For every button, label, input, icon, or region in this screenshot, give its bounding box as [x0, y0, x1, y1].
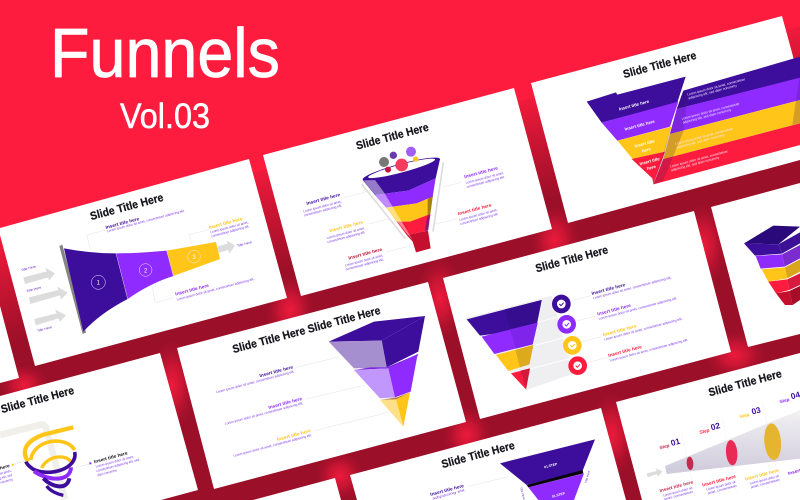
left labels: here — [641, 146, 652, 153]
band descriptions: Lorem ipsum dolor sit amet, consectetuer — [670, 149, 729, 169]
connector lines — [344, 182, 462, 252]
callout: top yellow — [208, 216, 250, 238]
band descriptions: Lorem ipsum dolor sit amet, consectetuer — [681, 101, 741, 121]
funnel rim — [361, 154, 441, 185]
funnel step 1 — [500, 439, 595, 485]
input arrows — [23, 268, 68, 325]
connector lines — [296, 357, 388, 431]
translucent fold overlay — [653, 73, 800, 184]
step labels: Step — [739, 412, 750, 419]
slide title: Slide Title Here — [0, 385, 75, 416]
band descriptions: Lorem ipsum dolor sit amet, consectetuer — [675, 126, 734, 146]
band descriptions: adipiscing elit, sed diam nonummy — [671, 155, 720, 172]
numbers — [97, 255, 196, 287]
step labels — [659, 389, 800, 450]
cone — [665, 410, 800, 474]
marker dots — [12, 462, 91, 466]
callouts: Insert title here — [608, 344, 643, 358]
slide title: Slide Title Here — [707, 368, 783, 399]
band descriptions: adipiscing elit, sed diam nonummy — [682, 108, 732, 125]
panel: spiral funnel slide — [0, 353, 198, 500]
callout: left top — [303, 192, 343, 217]
step labels: 02 — [710, 420, 721, 432]
callout: top yellow: Lorem ipsum dolor sit amet, — [210, 220, 249, 234]
right colored bands — [653, 57, 800, 184]
callout: right red: Insert title here — [457, 202, 492, 216]
numbered circles — [91, 250, 200, 289]
funnel side arrows — [362, 162, 443, 239]
numbers: 3 — [192, 255, 196, 261]
slide title: Slide Title Here — [89, 192, 165, 223]
funnel gray mouth bar — [59, 245, 86, 334]
callout: right — [93, 450, 140, 477]
callout: right violet: Insert title here — [464, 165, 499, 179]
panel: 3D pyramid slide — [177, 282, 466, 489]
callout: top purple: Insert title here — [105, 216, 140, 230]
callout: right violet: consectetuer adipiscing elit. — [466, 175, 505, 189]
funnel segments — [64, 242, 220, 332]
slide title: Slide Title Here — [534, 244, 610, 275]
callouts: Lorem ipsum dolor sit amet, consectetuer adipiscing elit. — [593, 275, 672, 300]
connector — [467, 477, 508, 487]
step labels: 01.STEP — [551, 491, 566, 499]
dotted connectors — [15, 461, 89, 467]
callouts: Insert title here — [591, 282, 626, 296]
arrow labels: Title Here — [26, 285, 42, 293]
arrow labels: Title Here — [37, 325, 53, 333]
arrow — [647, 468, 663, 477]
step labels: Step — [779, 397, 790, 404]
callout: bottom violet: Lorem ipsum dolor sit amet, consectetuer adipiscing elit. — [176, 277, 255, 302]
funnel highlight and shade — [363, 180, 433, 240]
numbers: 2 — [144, 268, 148, 274]
side labels — [519, 470, 591, 500]
panel: horizontal funnel slide — [0, 159, 287, 366]
callouts: Lorem ipsum dolor sit — [706, 480, 736, 492]
callouts: Lorem ipsum dolor sit — [749, 474, 779, 486]
callout: right red: consectetuer adipiscing elit. — [460, 212, 499, 226]
gray pipe arrow — [0, 425, 65, 499]
pyramid bottom section — [379, 392, 410, 427]
funnel layers — [467, 300, 542, 389]
arrow labels — [21, 240, 253, 333]
panel: 3D box funnel slide — [711, 183, 800, 347]
callouts — [659, 462, 800, 500]
callouts: amet, consectetuer — [750, 477, 781, 489]
step labels: Step — [699, 427, 710, 435]
slide title: Slide Title Here — [355, 122, 430, 153]
side labels: Title Here — [519, 487, 526, 500]
funnel layers — [363, 159, 440, 252]
slide title: Slide Title Here Slide Title Here — [231, 305, 382, 356]
heading: Funnels: Funnels — [50, 14, 280, 92]
callouts: Lorem ipsum dolor sit amet, consectetuer adipiscing elit. — [604, 317, 683, 342]
callout: purple: Insert title here — [259, 364, 294, 378]
spiral ribbon — [25, 427, 75, 495]
step labels: Step — [659, 443, 670, 450]
left labels — [618, 99, 661, 171]
callout: left top: Lorem ipsum dolor sit amet, — [303, 199, 342, 213]
callout: left yellow: Insert title here — [329, 219, 364, 233]
callout: left yellow: consectetuer adipiscing elit. — [327, 230, 366, 244]
callout: bottom violet: Insert title here — [175, 283, 210, 297]
connector lines — [87, 230, 208, 303]
panel: stacked funnel with checks — [443, 211, 731, 419]
callout: Insert title here — [430, 483, 465, 497]
side labels: Title Here — [584, 470, 591, 484]
callouts: Insert title here — [659, 479, 694, 493]
falling circles — [379, 147, 418, 173]
step labels — [544, 462, 566, 499]
gray rows — [465, 296, 574, 390]
callout: right violet: Lorem ipsum dolor sit amet, — [465, 171, 504, 185]
callout: yellow: Lorem ipsum dolor sit amet, consectetuer adipiscing elit. — [233, 433, 312, 458]
callouts: Insert title here — [597, 303, 632, 317]
callout: right red: Lorem ipsum dolor sit amet, — [459, 208, 498, 222]
callout: top yellow: Insert title here — [208, 216, 243, 230]
pyramid top section — [329, 316, 425, 368]
callouts: Insert title here — [745, 468, 780, 482]
box funnel — [744, 226, 800, 305]
callout: left yellow — [326, 219, 366, 244]
arrow labels: Title Here — [21, 264, 37, 272]
rim opening — [367, 155, 436, 181]
callout: left red: Lorem ipsum dolor sit amet, — [345, 253, 384, 267]
callout: left yellow: Lorem ipsum dolor sit amet, — [326, 226, 365, 240]
callout: top yellow: consectetuer adipiscing elit. — [211, 224, 250, 238]
callouts: Lorem ipsum dolor sit amet, consectetuer adipiscing elit. — [598, 296, 678, 321]
dotted guides — [682, 403, 780, 497]
arrow labels: Title Here — [237, 240, 253, 248]
panel: partial slide bottom — [253, 478, 341, 500]
pyramid middle section — [354, 354, 418, 398]
callout: right: diam nonummy — [97, 468, 118, 477]
output arrow — [217, 241, 235, 254]
callout: left top: Insert title here — [306, 192, 341, 206]
panel: cone steps slide — [616, 353, 800, 500]
callouts: amet, consectetuer — [707, 483, 738, 495]
callout: purple: Lorem ipsum dolor sit amet, consectetuer adipiscing elit. — [216, 369, 295, 394]
callout: right violet — [464, 165, 505, 189]
heading: Vol.03: Vol.03 — [120, 97, 210, 136]
connector lines — [572, 296, 607, 363]
callout: right: Insert title here — [93, 450, 128, 464]
band descriptions — [670, 77, 746, 172]
step labels: 01.STEP — [544, 462, 558, 469]
cone rings — [686, 423, 783, 470]
numbers: 1 — [97, 281, 101, 287]
band descriptions: adipiscing elit, sed diam nonummy — [676, 133, 726, 150]
callout: yellow: Insert title here — [276, 428, 312, 442]
check icons — [552, 295, 587, 375]
left funnel layers — [587, 77, 686, 184]
callout: violet: Lorem ipsum dolor sit amet, consectetuer adipiscing elit. — [224, 401, 304, 426]
panel: step funnel slide — [350, 408, 626, 500]
callout: left red: consectetuer adipiscing elit. — [345, 257, 384, 271]
step labels: 03 — [750, 404, 762, 417]
callouts: Lorem ipsum dolor sit amet, consectetuer adipiscing elit. — [609, 338, 689, 363]
callout: left — [0, 463, 14, 488]
panel: partial slide far left — [0, 306, 19, 383]
black divider — [527, 470, 583, 487]
left labels: here — [646, 164, 657, 171]
slide title: Slide Title Here — [440, 440, 516, 471]
callout: left red: Insert title here — [348, 247, 383, 261]
left labels: Insert title here — [618, 99, 650, 112]
step labels: 01 — [670, 436, 681, 448]
panel: striped funnel slide — [531, 16, 800, 223]
callout: right red — [457, 202, 499, 226]
callout: left red — [345, 247, 384, 271]
left labels: Insert title — [639, 156, 661, 166]
callouts: Insert title here — [602, 323, 637, 337]
left labels: Insert title here — [624, 119, 656, 132]
band descriptions: Lorem ipsum dolor sit amet, consectetuer — [687, 77, 746, 97]
callout: top purple: Lorem ipsum dolor sit amet, consectetuer adipiscing elit. — [107, 209, 185, 233]
funnel step 2 — [528, 473, 584, 500]
panel: cone funnel slide — [263, 88, 552, 296]
callouts: Lorem ipsum dolor sit — [663, 486, 693, 498]
slide title: Slide Title Here — [622, 50, 698, 81]
callout: right: consectetuer adipiscing elit, sed — [96, 458, 140, 473]
callout: left top: consectetuer adipiscing elit. — [304, 203, 343, 217]
left labels: Insert title — [634, 138, 656, 149]
band descriptions: adipiscing elit, sed diam nonummy — [688, 83, 738, 100]
callouts: Insert title here — [702, 474, 737, 488]
callout: violet: Insert title here — [268, 396, 303, 410]
callout: right: Lorem ipsum dolor sit amet, — [95, 455, 134, 469]
callouts — [591, 275, 689, 363]
